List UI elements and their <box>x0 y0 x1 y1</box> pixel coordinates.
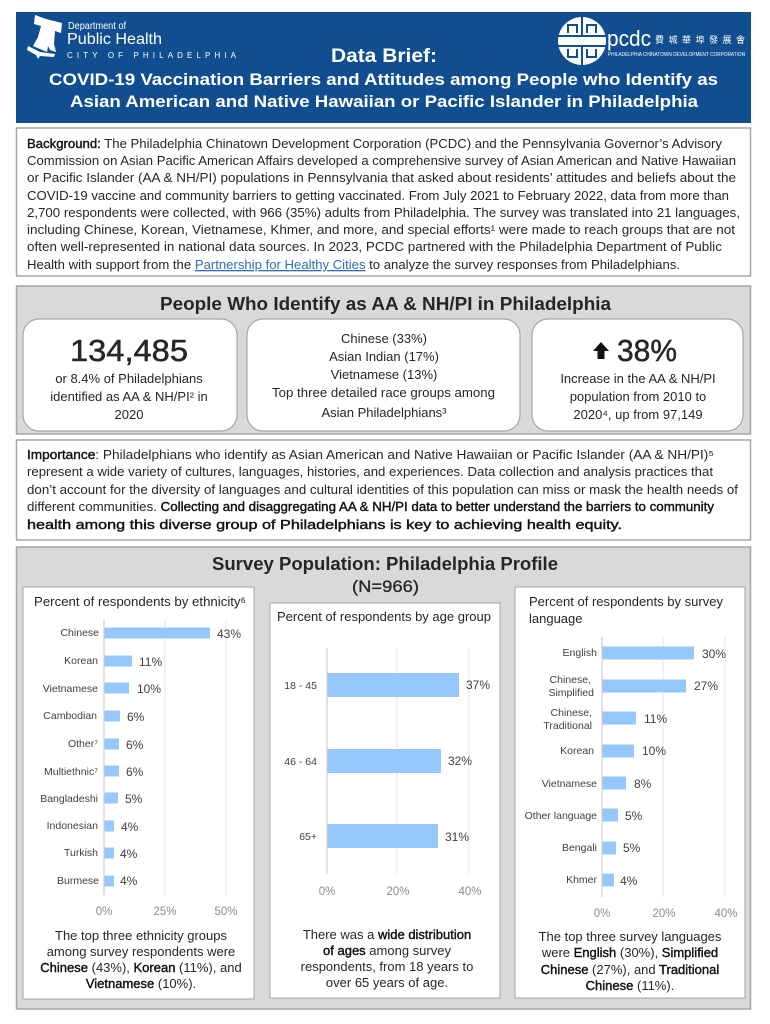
bar chart: ethnicity: 5% <box>125 792 143 806</box>
caption: ethnicity <box>40 928 242 991</box>
bar chart: ethnicity: Bangladeshi <box>40 793 98 805</box>
caption: age: There was a wide distribution <box>303 927 471 942</box>
Department of Public Health wordmark: Department of <box>68 21 126 32</box>
bar chart: ethnicity: Chinese <box>60 627 99 639</box>
bar chart: ethnicity: Other⁷ <box>68 738 98 750</box>
panel: survey population <box>16 547 750 1009</box>
panel: background: Background: The Philadelphia Chinatown Development Corporation (PCDC) and the Pennsylvania Governor’s Advisory <box>27 136 723 151</box>
caption: ethnicity: Vietnamese (10%). <box>86 976 196 991</box>
bar chart: ethnicity: 6% <box>127 710 145 724</box>
bar chart: age: 20% <box>386 886 410 898</box>
bar chart: ethnicity: Cambodian <box>43 710 97 722</box>
panel: background: Health with support from the Partnership for Healthy Cities to analyze the survey responses from Philadelphians. <box>27 257 680 272</box>
bar chart: ethnicity: Korean <box>64 655 98 667</box>
bar chart: ethnicity: 6% <box>126 765 144 779</box>
bar chart: age: 18 - 45 <box>284 680 317 692</box>
bar chart: language: 0% <box>594 908 610 920</box>
bar chart: language <box>525 637 738 920</box>
card: ethnicity chart: Percent of respondents by ethnicity⁶ <box>34 594 246 609</box>
card: age chart <box>270 603 500 998</box>
PCDC wordmark: PHILADELPHIA CHINATOWN DEVELOPMENT CORPORATION <box>608 52 745 58</box>
card: population increase: population from 2010 to <box>570 389 706 404</box>
panel: background: Commission on Asian Pacific American Affairs developed a comprehensive survey of Asian American and Native Hawaiian <box>27 153 736 168</box>
caption: age: of ages among survey <box>323 943 451 958</box>
bar chart: age: 0% <box>319 886 335 898</box>
panel: importance: Importance : Philadelphians who identify as Asian American and Native Hawaiian or Pacific Islander (AA & NH/PI)⁵ <box>27 447 714 462</box>
caption: ethnicity: The top three ethnicity groups <box>55 928 227 943</box>
heading: (N=966) <box>352 577 419 596</box>
bar chart: language: 8% <box>634 777 652 791</box>
card: top race groups: Asian Indian (17%) <box>329 349 439 364</box>
PCDC wordmark <box>607 26 745 58</box>
bar chart: ethnicity: 4% <box>120 847 138 861</box>
bar chart: language: Other language <box>525 810 597 822</box>
card: top race groups: Asian Philadelphians³ <box>321 405 447 420</box>
card: total population <box>23 319 237 431</box>
panel: background: 2,700 respondents were collected, with 966 (35%) adults from Philadelphia. The survey was translated into 21 languages, <box>27 205 740 220</box>
bar chart: ethnicity: 4% <box>121 820 139 834</box>
panel: background: or Pacific Islander (AA & NH/PI) populations in Pennsylvania that asked about residents’ attitudes and beliefs about the <box>27 170 736 185</box>
bar chart: language: 11% <box>644 712 667 726</box>
card: total population: 134,485 <box>70 333 188 368</box>
card: language chart: Percent of respondents by survey <box>529 594 723 609</box>
card: top race groups <box>247 319 520 431</box>
card: age chart: Percent of respondents by age group <box>277 609 491 624</box>
panel: background: including Chinese, Korean, Vietnamese, Khmer, and more, and special efforts¹ were made to reach groups that are not <box>27 222 735 237</box>
bar chart: ethnicity: Indonesian <box>47 820 98 832</box>
panel: importance: health among this diverse group of Philadelphians is key to achieving health equity. <box>27 517 622 532</box>
card: top race groups: Top three detailed race groups among <box>272 385 495 400</box>
header banner <box>16 12 751 123</box>
bar chart: language: 5% <box>623 841 641 855</box>
card: population increase <box>532 319 743 431</box>
panel: importance: represent a wide variety of cultures, languages, histories, and experiences. Data collection and analysis practices that <box>27 464 713 479</box>
panel: background: often well-represented in national data sources. In 2023, PCDC partnered with the Philadelphia Department of Public <box>27 239 723 254</box>
card: language chart <box>515 587 745 998</box>
caption: age: over 65 years of age. <box>326 975 448 990</box>
bar chart: ethnicity: 6% <box>126 738 144 752</box>
bar chart: age: 32% <box>448 754 472 768</box>
panel: background: COVID-19 vaccine and community barriers to getting vaccinated. From July 2021 to February 2022, data from more than <box>27 188 729 203</box>
bar chart: ethnicity: 0% <box>96 906 112 918</box>
panel: people who identify as AA & NH/PI <box>16 286 750 434</box>
card: language chart: language <box>529 611 582 626</box>
caption: age <box>301 927 473 990</box>
bar chart: age: 46 - 64 <box>284 756 317 768</box>
bar chart: language: Simplified <box>548 687 594 699</box>
title: Asian American and Native Hawaiian or Pacific Islander in Philadelphia <box>70 92 699 111</box>
bar chart: language: Chinese, <box>550 674 591 686</box>
card: top race groups: Vietnamese (13%) <box>331 367 437 382</box>
card: ethnicity chart <box>23 587 254 999</box>
bar chart: language: Vietnamese <box>542 778 597 790</box>
card: top race groups: Chinese (33%) <box>341 331 427 346</box>
bar chart: age: 37% <box>466 678 490 692</box>
Department of Public Health wordmark <box>67 21 237 60</box>
bar chart: language: 4% <box>620 874 638 888</box>
bar chart: language: English <box>563 647 597 659</box>
caption: age: respondents, from 18 years to <box>301 959 473 974</box>
panel: importance: different communities. Collecting and disaggregating AA & NH/PI data to better understand the barriers to community <box>27 499 715 514</box>
bar chart: ethnicity: 11% <box>139 655 162 669</box>
bar chart: ethnicity: Multiethnic⁷ <box>44 766 98 778</box>
card: total population: or 8.4% of Philadelphians <box>55 371 203 386</box>
bar chart: ethnicity: 25% <box>153 906 177 918</box>
caption: language: were English (30%), Simplified <box>541 945 718 960</box>
card: population increase: 2020⁴, up from 97,149 <box>573 407 703 422</box>
bar chart: language: 20% <box>652 908 676 920</box>
icon: PCDC emblem <box>558 17 606 65</box>
bar chart: ethnicity: 43% <box>217 627 241 641</box>
Department of Public Health wordmark: CITY OF PHILADELPHIA <box>67 51 237 60</box>
bar chart: language: 5% <box>625 809 643 823</box>
title: COVID-19 Vaccination Barriers and Attitudes among People who Identify as <box>49 70 718 89</box>
card: total population: identified as AA & NH/PI² in <box>50 389 208 404</box>
caption: language: Chinese (27%), and Traditional <box>541 962 719 977</box>
title <box>49 46 718 111</box>
icon: Liberty Bell logo <box>27 15 62 59</box>
Department of Public Health wordmark: Public Health <box>67 31 162 48</box>
bar chart: language: 40% <box>714 908 738 920</box>
bar chart: age: 40% <box>458 886 482 898</box>
heading: People Who Identify as AA & NH/PI in Philadelphia <box>160 294 612 314</box>
caption: language <box>539 929 722 993</box>
bar chart: language: 30% <box>702 647 726 661</box>
bar chart: ethnicity: Vietnamese <box>43 683 98 695</box>
caption: language: The top three survey languages <box>539 929 722 944</box>
card: total population: 2020 <box>115 407 143 422</box>
bar chart: language: Chinese, <box>551 707 592 719</box>
caption: ethnicity: Chinese (43%), Korean (11%), and <box>40 960 242 975</box>
card: population increase: Increase in the AA & NH/PI <box>560 371 716 386</box>
bar chart: language: Khmer <box>566 874 597 886</box>
PCDC wordmark: 費城華埠發展會 <box>655 34 745 45</box>
bar chart: age: 31% <box>445 830 469 844</box>
bar chart: age: 65+ <box>299 831 317 843</box>
bar chart: age <box>284 648 490 898</box>
panel: importance <box>16 440 750 540</box>
caption: ethnicity: among survey respondents were <box>47 944 235 959</box>
bar chart: language: Korean <box>560 745 594 757</box>
bar chart: ethnicity <box>40 620 241 918</box>
bar chart: language: 10% <box>642 744 666 758</box>
title: Data Brief: <box>331 46 437 67</box>
bar chart: ethnicity: 50% <box>214 906 238 918</box>
heading <box>212 554 558 596</box>
bar chart: language: 27% <box>694 679 718 693</box>
bar chart: ethnicity: Turkish <box>64 847 98 859</box>
PCDC wordmark: pcdc <box>607 26 651 51</box>
caption: language: Chinese (11%). <box>586 978 674 993</box>
bar chart: language: Bengali <box>562 842 597 854</box>
icon: up arrow <box>593 342 609 359</box>
bar chart: ethnicity: Burmese <box>57 875 99 887</box>
panel: background <box>16 128 750 276</box>
panel: importance: don’t account for the diversity of languages and cultural identities of this population can miss or mask the health needs of <box>27 482 738 497</box>
card: population increase: 38% <box>617 333 677 368</box>
bar chart: ethnicity: 4% <box>120 874 138 888</box>
bar chart: ethnicity: 10% <box>137 682 161 696</box>
bar chart: language: Traditional <box>543 720 592 732</box>
heading: Survey Population: Philadelphia Profile <box>212 554 558 574</box>
